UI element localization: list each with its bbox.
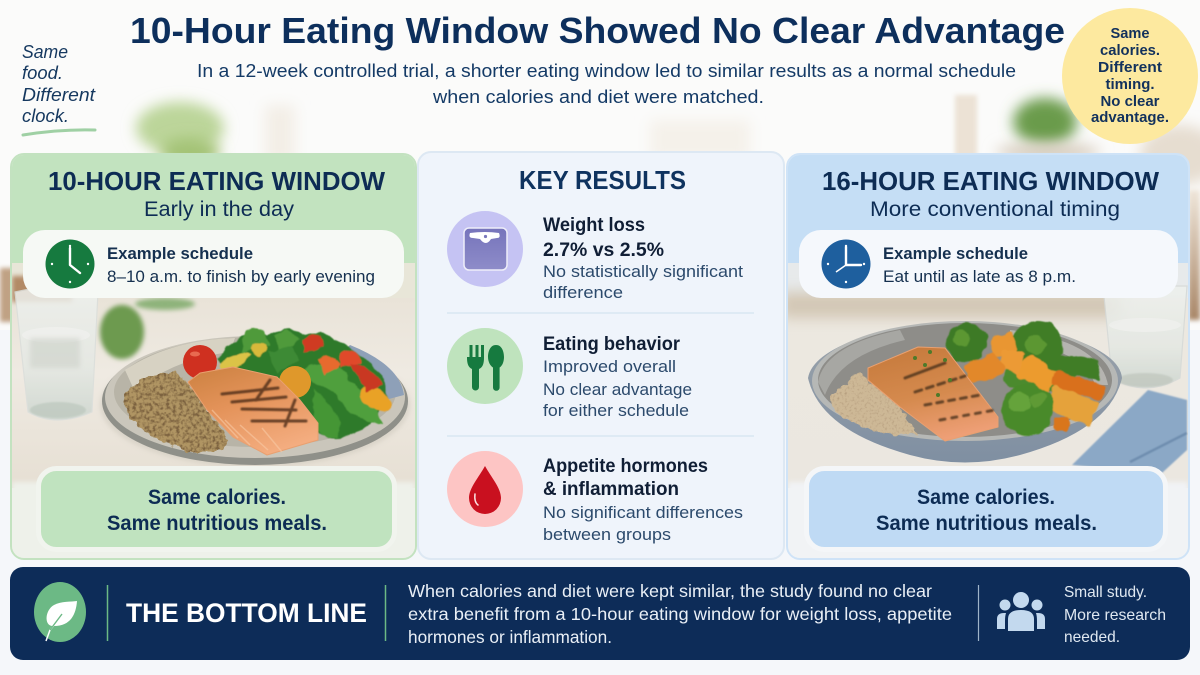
callout: same calories: Same nutritious meals. (876, 512, 1097, 535)
eating behavior text: Eating behavior (543, 334, 681, 355)
handwritten note: clock. (22, 106, 69, 126)
callout: same calories (38, 468, 394, 550)
yellow badge: Different (1098, 59, 1162, 76)
yellow badge: calories. (1100, 42, 1160, 59)
heading: key results: KEY RESULTS (519, 165, 686, 195)
handwritten note (22, 42, 96, 135)
yellow badge: Same (1110, 25, 1150, 42)
bottom line text (408, 581, 952, 647)
appetite text: Appetite hormones (543, 456, 708, 477)
eating behavior text (543, 334, 692, 420)
schedule text (883, 244, 1076, 286)
panel heading (48, 166, 385, 221)
icon: green clock (46, 240, 94, 288)
subtitle: In a 12-week controlled trial, a shorter eating window led to similar results as a normal schedule (197, 60, 1016, 81)
weight loss text: Weight loss (543, 215, 645, 236)
bottom line text: hormones or inflammation. (408, 627, 612, 647)
icon: blood drop (447, 451, 523, 527)
schedule pill (23, 230, 404, 298)
panel heading: 10-HOUR EATING WINDOW (48, 166, 385, 196)
appetite text: No significant differences (543, 503, 743, 522)
eating behavior text: for either schedule (543, 401, 689, 420)
callout: same calories: Same calories. (917, 486, 1055, 509)
subtitle (197, 60, 1016, 107)
small study note (1064, 584, 1166, 646)
small study note: Small study. (1064, 584, 1147, 601)
panel heading: Early in the day (144, 198, 295, 221)
title: 10-Hour Eating Window Showed No Clear Advantage (130, 10, 1065, 51)
result: eating behavior (447, 328, 692, 420)
heading: the bottom line: THE BOTTOM LINE (126, 598, 367, 628)
appetite text (543, 456, 743, 544)
callout: same calories: Same nutritious meals. (107, 512, 327, 535)
plate with salmon, quinoa and salad (100, 328, 410, 467)
bottom line text: extra benefit from a 10-hour eating window for weight loss, appetite (408, 604, 952, 624)
schedule text: Example schedule (107, 244, 253, 263)
subtitle: when calories and diet were matched. (432, 86, 764, 107)
panel: key results (418, 152, 784, 559)
panel: 16-hour eating window (780, 154, 1189, 559)
yellow badge: timing. (1106, 76, 1154, 93)
icon: people (997, 592, 1045, 631)
weight loss text: difference (543, 283, 623, 302)
panel heading (822, 166, 1159, 221)
schedule text (107, 244, 375, 286)
weight loss text: No statistically significant (543, 262, 743, 281)
panel: 10-hour eating window (11, 154, 416, 559)
icon: leaf (34, 582, 86, 642)
handwritten note: food. (22, 63, 63, 83)
small study note: needed. (1064, 629, 1120, 646)
water glass (15, 287, 98, 420)
panel: the bottom line (10, 567, 1190, 660)
icon: fork and spoon (447, 328, 523, 404)
plant pot behind glass (100, 298, 195, 359)
weight loss text: 2.7% vs 2.5% (543, 240, 664, 261)
callout: same calories: Same calories. (148, 486, 286, 509)
napkin (1072, 390, 1187, 473)
panel heading: 16-HOUR EATING WINDOW (822, 166, 1159, 196)
icon: blue clock (822, 240, 870, 288)
schedule text: Eat until as late as 8 p.m. (883, 267, 1076, 286)
icon: scale (447, 211, 523, 287)
appetite text: & inflammation (543, 479, 679, 500)
callout: same calories (806, 468, 1166, 550)
result: weight loss (447, 211, 743, 302)
handwritten note: Different (22, 85, 96, 105)
panel heading: More conventional timing (870, 198, 1120, 221)
handwritten note: Same (22, 42, 68, 62)
bottom line text: When calories and diet were kept similar, the study found no clear (408, 581, 932, 601)
schedule text: 8–10 a.m. to finish by early evening (107, 267, 375, 286)
small study note: More research (1064, 607, 1166, 624)
yellow badge: No clear (1100, 93, 1160, 110)
bowl with salmon, quinoa and vegetables (808, 321, 1122, 462)
schedule pill (799, 230, 1178, 298)
schedule text: Example schedule (883, 244, 1028, 263)
weight loss text (543, 215, 743, 302)
eating behavior text: No clear advantage (543, 380, 692, 399)
eating behavior text: Improved overall (543, 357, 676, 376)
appetite text: between groups (543, 525, 671, 544)
yellow badge (1062, 8, 1198, 144)
water glass (1103, 286, 1187, 388)
yellow badge: advantage. (1091, 109, 1169, 126)
result: appetite hormones and inflammation (447, 451, 743, 544)
